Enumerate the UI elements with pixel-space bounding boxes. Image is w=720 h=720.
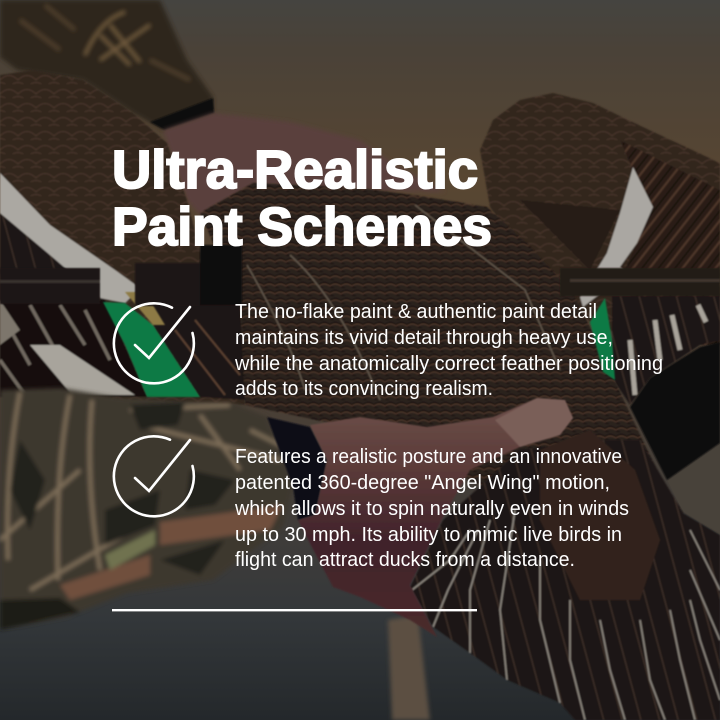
paragraph 1: adds to its convincing realism. — [235, 378, 493, 400]
lower wing feather fan — [410, 430, 720, 720]
paragraph 2: flight can attract ducks from a distance. — [235, 549, 575, 571]
upper hand — [163, 113, 445, 215]
central body — [200, 183, 683, 560]
upper sleeve — [0, 0, 213, 130]
title — [112, 140, 492, 257]
check icon 2 — [114, 436, 194, 516]
wooden stake — [388, 615, 430, 720]
paragraph 1 — [234, 301, 663, 400]
left green stripe — [103, 292, 200, 397]
paragraph 1: while the anatomically correct feather positioning — [234, 353, 663, 375]
divider line — [112, 609, 477, 611]
paragraph 2: up to 30 mph. Its ability to mimic live birds in — [235, 524, 622, 546]
paragraph 2 — [234, 446, 629, 571]
check icon 1 — [114, 303, 194, 383]
right wing — [480, 93, 720, 405]
black body shape right — [630, 342, 720, 480]
right green patch — [590, 298, 615, 380]
paragraph 2: patented 360-degree "Angel Wing" motion, — [235, 472, 610, 494]
white speculum — [580, 167, 653, 307]
paragraph 1: maintains its vivid detail through heavy use, — [235, 327, 613, 349]
paragraph 1: The no-flake paint & authentic paint detail — [235, 301, 597, 323]
title: Paint Schemes — [112, 197, 492, 257]
left wing — [0, 70, 250, 405]
upper sleeve cuff — [150, 98, 214, 130]
paragraph 2: Features a realistic posture and an innovative — [235, 446, 622, 468]
lower cuff — [267, 417, 327, 520]
paragraph 2: which allows it to spin naturally even in winds — [234, 498, 629, 520]
white strip — [0, 173, 140, 303]
grey backdrop by right wing — [667, 443, 720, 535]
horizontal shaft — [0, 245, 720, 306]
lower right feathers — [612, 296, 720, 405]
lower hand and thumb — [298, 398, 573, 637]
title: Ultra-Realistic — [112, 140, 478, 200]
lower sleeve with camo pattern — [0, 388, 293, 630]
